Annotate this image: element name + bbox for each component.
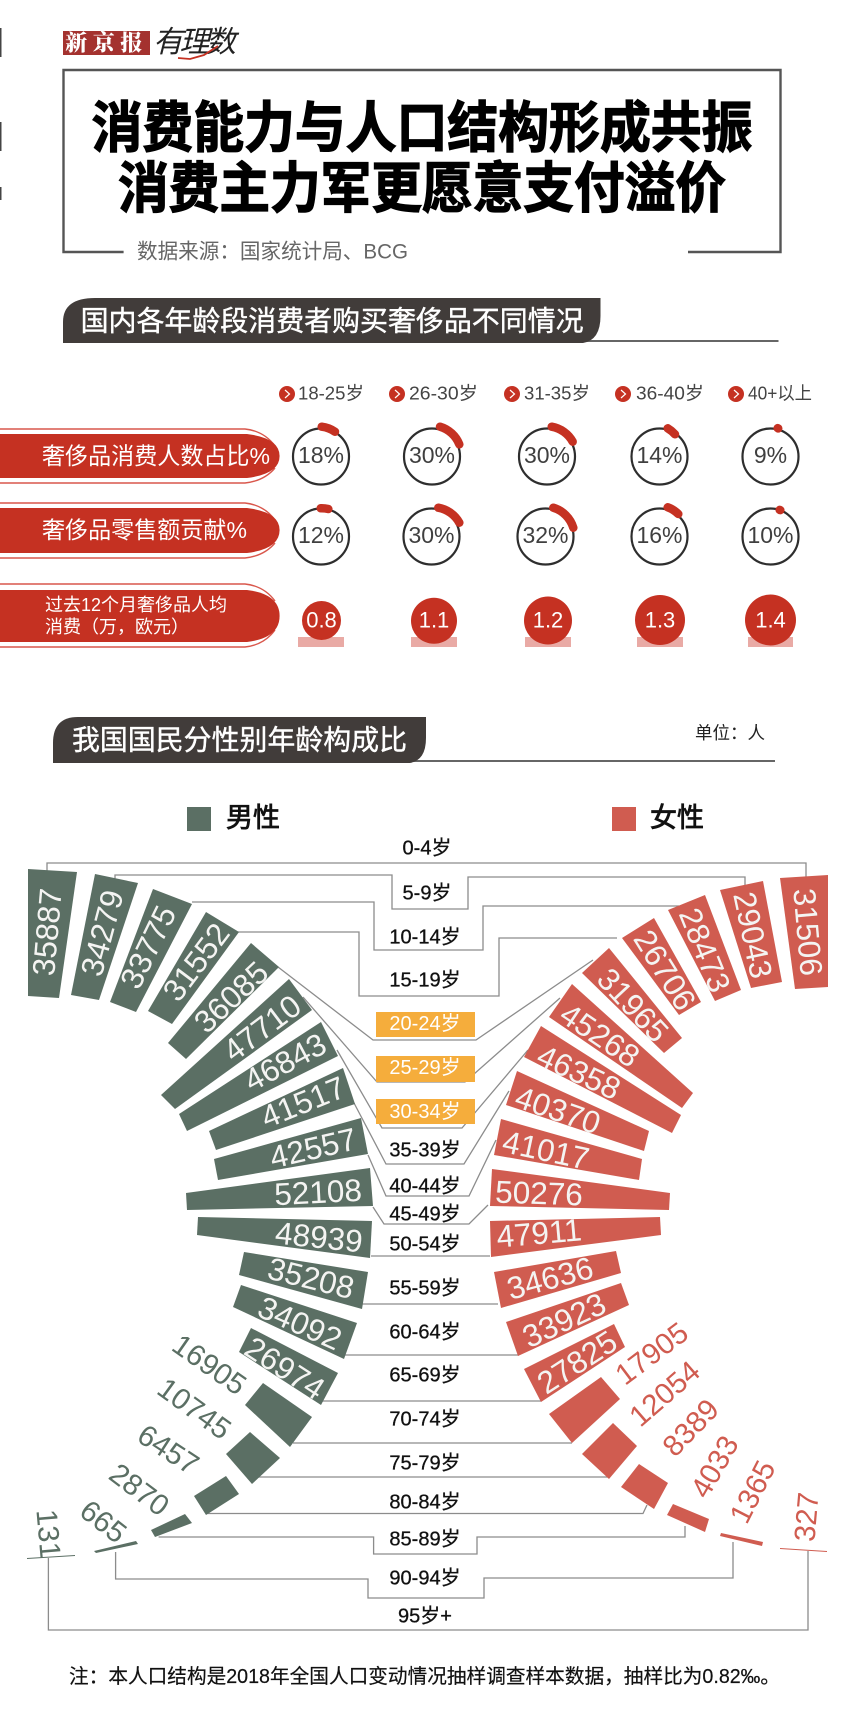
- female values: 17905: [609, 1316, 695, 1392]
- female values: 34636: [503, 1249, 597, 1307]
- age labels: 75-79岁: [389, 1452, 461, 1474]
- age labels: 95岁+: [398, 1604, 452, 1628]
- highlighted age: 30-34: [376, 1099, 475, 1124]
- male values: 35208: [264, 1250, 358, 1306]
- source note: 数据来源：国家统计局、BCG: [137, 240, 408, 264]
- female values: 33923: [517, 1285, 611, 1355]
- age group legend: [279, 384, 812, 404]
- title: 消费主力军更愿意支付溢价: [118, 158, 726, 220]
- male values: 35887: [25, 887, 69, 977]
- age labels: 35-39岁: [389, 1138, 461, 1162]
- title: 消费能力与人口结构形成共振: [92, 97, 752, 159]
- age group legend: 36-40岁: [636, 384, 704, 404]
- female values: 12054: [623, 1355, 707, 1433]
- row label: consumer share: [0, 429, 280, 483]
- highlighted age: 20-24: 20-24岁: [389, 1012, 461, 1035]
- female values: 28473: [672, 903, 738, 997]
- row label: consumer share: 奢侈品消费人数占比%: [42, 443, 270, 469]
- footnote: 注：本人口结构是2018年全国人口变动情况抽样调查样本数据，抽样比为0.82‰。: [69, 1665, 780, 1688]
- highlighted age: 20-24: [376, 1012, 475, 1037]
- highlighted age: 30-34: 30-34岁: [389, 1100, 461, 1123]
- age labels: 55-59岁: [389, 1276, 461, 1300]
- legend: female: [612, 803, 704, 833]
- male values: 42557: [266, 1121, 360, 1175]
- bubble chart: spend per person: 1.1: [419, 608, 449, 632]
- male values: 31552: [155, 916, 237, 1008]
- ring charts: consumer share: 30%: [409, 442, 455, 468]
- bubble chart: spend per person: 1.4: [755, 608, 786, 632]
- ring charts: consumer share: 14%: [636, 442, 683, 468]
- male values: 33775: [113, 900, 183, 994]
- unit note: 单位：人: [695, 723, 765, 743]
- legend: male: 男性: [226, 803, 280, 833]
- age labels: 40-44岁: [389, 1174, 461, 1198]
- male values: 16905: [166, 1328, 252, 1402]
- male values: 48939: [274, 1215, 364, 1259]
- age labels: [376, 836, 475, 1628]
- ring charts: retail contribution: 16%: [636, 522, 683, 548]
- row label: retail contribution: 奢侈品零售额贡献%: [42, 517, 247, 543]
- age labels: 50-54岁: [389, 1232, 461, 1256]
- age group legend: 26-30岁: [409, 384, 478, 404]
- section heading: luxury purchases: 国内各年龄段消费者购买奢侈品不同情况: [81, 306, 584, 336]
- male values: 131: [29, 1508, 67, 1560]
- ring charts: retail contribution: 32%: [522, 522, 569, 548]
- age labels: 10-14岁: [389, 926, 461, 948]
- female values: 1365: [723, 1455, 783, 1529]
- row label: spend per person: 消费（万，欧元）: [45, 617, 189, 637]
- bubble chart: spend per person: 1.3: [645, 608, 675, 632]
- ring charts: retail contribution: [293, 507, 798, 564]
- age labels: 90-94岁: [389, 1566, 461, 1590]
- legend: female: 女性: [650, 803, 704, 833]
- row label: spend per person: 过去12个月奢侈品人均: [45, 595, 227, 615]
- section heading: population: 我国国民分性别年龄构成比: [72, 724, 407, 756]
- male values: 47710: [216, 987, 308, 1069]
- age labels: 85-89岁: [389, 1528, 461, 1550]
- bubble chart: spend per person: 0.8: [306, 608, 337, 632]
- highlighted age: 25-29: [376, 1056, 475, 1082]
- row label: retail contribution: [0, 503, 280, 558]
- female values: 29043: [726, 888, 780, 982]
- age labels: 80-84岁: [389, 1490, 461, 1514]
- logo: 新京报 有理数: 有理数: [151, 25, 242, 59]
- male values: 34092: [253, 1289, 347, 1357]
- ring charts: consumer share: [293, 427, 798, 484]
- female values: 4033: [684, 1430, 746, 1504]
- female values: 31965: [590, 961, 676, 1049]
- title: [92, 97, 752, 220]
- male values: 26974: [238, 1329, 332, 1407]
- male values: 2870: [103, 1457, 175, 1523]
- age labels: 15-19岁: [389, 968, 461, 992]
- male bars: [27, 869, 373, 1559]
- age labels: 70-74岁: [389, 1408, 461, 1430]
- logo: 新京报 有理数: [63, 25, 242, 59]
- female values: 47911: [495, 1211, 583, 1255]
- female values: 27825: [530, 1323, 624, 1401]
- section heading: population: [53, 717, 775, 763]
- bubble chart: spend per person: 1.2: [533, 608, 563, 632]
- row label: spend per person: [0, 584, 280, 647]
- age labels: 65-69岁: [389, 1364, 461, 1386]
- section heading: luxury purchases: [63, 298, 778, 343]
- title frame: [64, 70, 780, 252]
- male values: 665: [73, 1494, 133, 1550]
- ring charts: consumer share: 9%: [754, 442, 787, 468]
- female values: 40370: [511, 1079, 605, 1141]
- male values: 36085: [187, 954, 275, 1040]
- female values: 41017: [499, 1123, 593, 1177]
- female values: 46358: [532, 1037, 626, 1107]
- connector lines: [47, 863, 808, 1630]
- ring charts: retail contribution: 30%: [408, 522, 455, 548]
- ring charts: consumer share: 18%: [298, 442, 344, 468]
- male values: 46843: [238, 1026, 332, 1098]
- female values: 45268: [554, 996, 646, 1074]
- age labels: 45-49岁: [389, 1202, 461, 1226]
- male values: 52108: [273, 1172, 363, 1212]
- female values: 327: [788, 1491, 826, 1543]
- age labels: 60-64岁: [389, 1320, 461, 1344]
- female bars: [490, 875, 828, 1552]
- age labels: 0-4岁: [403, 836, 451, 860]
- male values: 6457: [131, 1418, 205, 1482]
- female values: 31506: [786, 887, 830, 977]
- ring charts: retail contribution: 10%: [747, 522, 794, 548]
- highlighted age: 25-29: 25-29岁: [389, 1056, 461, 1079]
- age group legend: 18-25岁: [298, 384, 364, 404]
- female values: 26706: [627, 923, 703, 1017]
- logo: 新京报 有理数: 新京报: [65, 30, 148, 56]
- male values: [25, 886, 364, 1560]
- age group legend: 31-35岁: [524, 384, 590, 404]
- female values: 8389: [656, 1393, 726, 1463]
- female values: 50276: [495, 1173, 583, 1213]
- male values: 41517: [256, 1069, 350, 1135]
- male values: 10745: [151, 1372, 237, 1446]
- age group legend: 40+以上: [748, 384, 812, 404]
- ring charts: consumer share: 30%: [524, 442, 570, 468]
- male values: 34279: [73, 886, 131, 980]
- ring charts: retail contribution: 12%: [298, 522, 344, 548]
- bubble chart: spend per person: [298, 594, 796, 647]
- legend: male: [187, 803, 280, 833]
- female values: [495, 887, 830, 1543]
- age labels: 5-9岁: [403, 882, 451, 904]
